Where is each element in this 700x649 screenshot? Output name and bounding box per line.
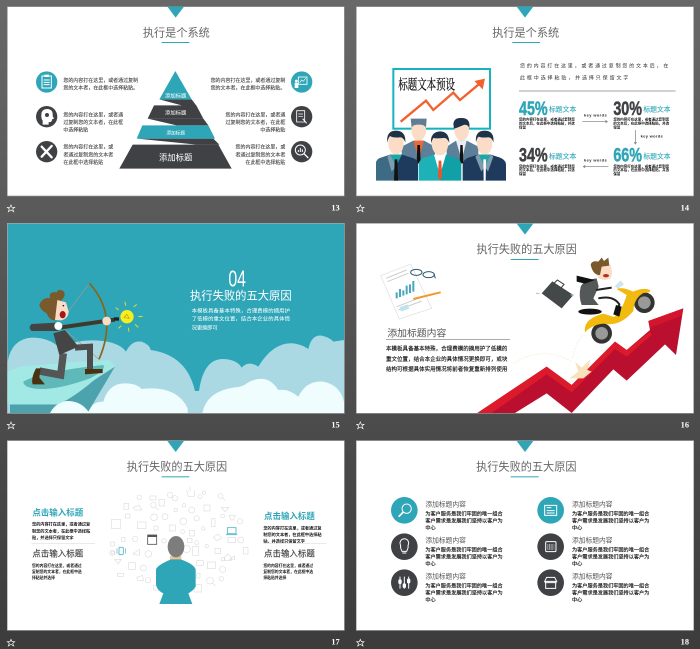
item: light bulb: 为客户服务是我们牢固的唯一组合 (425, 545, 503, 553)
paragraph: 重文位置，结合本企业的具体情况更换即可，或块 (386, 355, 508, 363)
archer with bow (30, 283, 115, 384)
item: sliders: 为客户服务是我们牢固的唯一组合 (425, 581, 503, 589)
footer star and page number (357, 203, 690, 212)
pyramid: 添加标题 (159, 153, 193, 163)
seat (578, 309, 602, 315)
wheels (591, 292, 655, 344)
slide 16: failure reasons with scooter (356, 223, 694, 429)
left text blocks: 您的内容打在这里，或者通 (63, 111, 123, 118)
stat: 45%: 的文本后，在此框中选择粘贴，并选 (519, 120, 575, 125)
front centre man (419, 131, 461, 181)
footer star and page number (7, 637, 340, 646)
footer star and page number: 15 (331, 420, 340, 429)
right text column: 您的内容打在这里，或者通过 (263, 563, 313, 568)
back right man (447, 118, 478, 163)
right text column: 贴，并选择只保留文字 (263, 538, 305, 544)
stat: 34%: 的文本后，在此框中选择粘贴，并选 (519, 167, 575, 172)
slide 14: people and percentages (356, 7, 694, 212)
title: 执行是个系统 (143, 25, 210, 39)
slide 17: thinking person with icon cloud (7, 441, 344, 646)
title: 执行失败的五大原因 (127, 459, 227, 473)
item: calendar: 为客户服务是我们牢固的唯一组合 (572, 545, 649, 553)
jacket (580, 278, 599, 305)
item: store: 为客户服务是我们牢固的唯一组合 (572, 581, 649, 589)
item: calendar (537, 533, 649, 567)
item: magnifier: 中心 (425, 523, 436, 531)
left text column: 点击输入标题 (32, 507, 84, 517)
stat: 34% (519, 146, 576, 176)
paragraph: 本模板具备基本特殊，合理费模的摘用护了低模的 (386, 345, 508, 353)
front left man (376, 131, 418, 181)
slide 13: system pyramid (7, 7, 344, 212)
item: sliders: 中心 (425, 595, 436, 603)
section description: 况更换即可 (192, 324, 218, 332)
subheading: 添加标题内容 (387, 326, 446, 339)
right text column: 点击输入标题 (264, 511, 315, 521)
left text column (32, 507, 91, 580)
cliff (8, 360, 115, 413)
stat: 34%: 标题文本 (549, 151, 576, 160)
front right man (463, 131, 506, 181)
stat: 30%: 30% (613, 99, 642, 120)
right text blocks: 在此框中选择粘贴 (245, 159, 285, 166)
intro text: 您的内容打在这里，或者通过复制您的文本后，在 (520, 63, 668, 70)
arrow: key words left: key words (584, 158, 607, 163)
item: calendar: 客户需求是发展我们坚持以客户为 (572, 553, 649, 561)
item: sliders: 客户需求是发展我们坚持以客户为 (425, 589, 503, 597)
intro text: 此框中选择粘贴，并选择只保留文字 (520, 74, 628, 81)
item: sliders: 添加标题内容 (425, 571, 466, 580)
item: sliders (391, 569, 503, 603)
item: calendar: 添加标题内容 (572, 535, 613, 544)
back left man (402, 119, 435, 163)
icon cloud (110, 487, 248, 592)
item: calendar: 中心 (572, 559, 582, 567)
stat: 45% (519, 99, 576, 129)
item: store: 客户需求是发展我们坚持以客户为 (572, 589, 649, 597)
item: newspaper: 为客户服务是我们牢固的唯一组合 (572, 509, 649, 517)
head (596, 265, 612, 280)
stat: 34%: 34% (519, 146, 548, 167)
right text blocks: 过复制您的文本者，在此框 (226, 119, 285, 126)
highlighted icons (117, 528, 237, 555)
item: light bulb: 添加标题内容 (425, 535, 466, 544)
section heading: 执行失败的五大原因 (190, 289, 292, 303)
item: newspaper: 中心 (572, 523, 582, 531)
item: newspaper (537, 497, 649, 531)
right text blocks: 您的内容打在这里，或者通过复制 (211, 77, 285, 84)
right text blocks: 者通过复制您的文本者 (235, 151, 285, 158)
hair (591, 258, 609, 275)
tie (577, 276, 595, 284)
title underline (162, 475, 189, 478)
stat: 30% (613, 99, 671, 129)
stat: 66% (613, 146, 671, 176)
arm and legs (596, 288, 619, 314)
stat: 45%: 保留 (519, 124, 526, 129)
top marker triangle (517, 7, 533, 18)
item: magnifier: 添加标题内容 (425, 500, 466, 509)
item: store (537, 569, 649, 603)
right text column: 点击输入标题 (264, 549, 315, 559)
item: newspaper: 客户需求是发展我们坚持以客户为 (572, 517, 649, 525)
footer star and page number (7, 203, 340, 212)
left text column: 您的内容打在这里，或者通过 (32, 563, 82, 568)
item: light bulb: 中心 (425, 559, 436, 567)
arrow: key words down: key words (641, 134, 663, 139)
slide 15: section cover with archer (7, 223, 344, 429)
footer star and page number (357, 637, 689, 646)
scooter body (585, 288, 650, 332)
footer star and page number (357, 420, 689, 429)
left text column: 制您的文本者，在此框中选择粘 (32, 527, 91, 533)
top marker triangle (517, 224, 533, 235)
left text blocks: 您的内容打在这里，或者通过复制 (63, 77, 138, 84)
intro text (520, 63, 668, 81)
right text column: 择粘贴并选择 (263, 575, 286, 580)
impact burst (569, 359, 592, 378)
left text blocks: 中选择粘贴 (63, 127, 88, 134)
icon: tools (36, 141, 57, 162)
stat: 66%: 66% (613, 146, 642, 167)
footer star and page number: 18 (681, 637, 689, 646)
top marker triangle (517, 441, 533, 452)
board with rising arrow (393, 69, 490, 129)
icon: document search (291, 106, 312, 127)
footer star and page number (7, 420, 340, 429)
mouth (603, 274, 609, 277)
arrow: key words right (582, 113, 607, 123)
pyramid: 添加标题 (166, 129, 185, 136)
right text column: 复制您的文本者，在此框中选 (263, 569, 313, 574)
title underline (511, 258, 539, 261)
paragraph: 结构可根据具体实用情况将前者恢复重新排列使用 (386, 365, 507, 373)
person from behind (156, 536, 196, 604)
dashed jump trail (513, 335, 583, 363)
stat: 66%: 保留 (613, 171, 621, 176)
stat: 45%: 您的内容打在这里，或者通过复制您 (519, 117, 575, 122)
left text blocks: 您的文本者，在此框中选择粘贴。 (63, 84, 138, 91)
arrow: key words right: key words (584, 113, 607, 118)
item: light bulb (391, 533, 503, 567)
footer star and page number: 14 (681, 203, 690, 212)
icon: presentation chart (291, 71, 312, 93)
mirror (614, 280, 624, 288)
footer star and page number: 13 (331, 203, 340, 212)
pyramid (119, 71, 232, 169)
right text blocks: 您的内容打在这里，或者通 (226, 111, 285, 118)
back clouds (8, 336, 344, 413)
stat: 66%: 您的内容打在这里，或者通过复制您 (613, 163, 670, 168)
right text column: 制您的文本者，在此框中选择粘 (263, 531, 322, 537)
section description: 了低模的重文位置，结合本企业的具体情 (192, 315, 291, 323)
stat: 30%: 保留 (613, 124, 621, 129)
left text blocks: 您的内容打在这里，或 (63, 144, 113, 151)
red rising arrow (477, 308, 683, 413)
pyramid: 添加标题 (165, 109, 187, 117)
slide 18: six item list (356, 441, 694, 646)
left text column: 点击输入标题 (32, 549, 84, 559)
item: magnifier (391, 497, 503, 531)
stat: 34%: 您的内容打在这里，或者通过复制您 (519, 163, 575, 168)
subheading rule (386, 338, 510, 340)
left text column: 择粘贴并选择 (32, 575, 55, 580)
flying briefcase (536, 280, 574, 308)
pyramid: 添加标题 (165, 91, 187, 99)
group of businessmen (376, 118, 506, 181)
right text column: 您的内容打在这里，或者通过复 (263, 524, 322, 530)
item: store: 中心 (572, 595, 582, 603)
arrow: key words down (634, 130, 663, 144)
left text blocks: 在此框中选择粘贴 (63, 159, 103, 166)
icon: glowing bulb (114, 302, 143, 332)
businessman on scooter (577, 258, 655, 344)
left text blocks (63, 77, 138, 166)
stat: 30%: 标题文本 (643, 105, 671, 114)
stat: 66%: 的文本后，在此框中选择粘贴，并选 (613, 167, 670, 172)
footer star and page number: 16 (681, 420, 689, 429)
item: light bulb: 客户需求是发展我们坚持以客户为 (425, 553, 503, 561)
icon: head (36, 106, 57, 127)
left text column: 贴，并选择只保留文字 (32, 534, 74, 540)
section description: 本模板具备基本特殊，合理费模的摘用护 (192, 306, 290, 314)
left text column: 您的内容打在这里，或者通过复 (32, 521, 91, 527)
stat: 45%: 标题文本 (549, 105, 576, 114)
title: 执行是个系统 (492, 25, 559, 39)
title underline (512, 41, 540, 44)
paragraph (386, 345, 508, 373)
left text blocks: 者通过复制您的文本者 (63, 151, 113, 158)
front clouds (50, 379, 344, 413)
item: magnifier: 为客户服务是我们牢固的唯一组合 (425, 509, 503, 517)
right text column (263, 511, 322, 580)
icon: clipboard (36, 71, 57, 93)
stat: 30%: 的文本后，在此框中选择粘贴，并选 (613, 120, 670, 125)
item: store: 添加标题内容 (572, 571, 613, 580)
icon: magnifier chart (291, 141, 312, 162)
title: 执行失败的五大原因 (476, 242, 577, 256)
right text blocks (211, 77, 285, 166)
right text blocks: 中选择粘贴 (260, 127, 285, 134)
left text blocks: 过复制您的文本者，在此框 (63, 119, 123, 126)
board with rising arrow: 标题文本预设 (398, 76, 455, 93)
top marker triangle (167, 7, 184, 18)
title underline (511, 475, 539, 478)
stat: 34%: 保留 (519, 171, 526, 176)
top marker triangle (167, 441, 184, 452)
arrow: key words left (583, 158, 608, 168)
item: newspaper: 添加标题内容 (572, 500, 613, 509)
footer star and page number: 17 (331, 637, 340, 646)
document with glasses and pencil (381, 264, 441, 319)
shoe (613, 305, 622, 317)
left text column: 复制您的文本者，在此框中选 (32, 569, 82, 574)
right text blocks: 您的文本者，在此框中选择粘贴。 (211, 84, 285, 91)
stat: 66%: 标题文本 (643, 151, 671, 160)
right text blocks: 您的内容打在这里，或 (235, 144, 285, 151)
stat: 30%: 您的内容打在这里，或者通过复制您 (613, 117, 670, 122)
section number: 04 (228, 265, 246, 291)
item: magnifier: 客户需求是发展我们坚持以客户为 (425, 517, 503, 525)
stat: 45%: 45% (519, 99, 548, 120)
title: 执行失败的五大原因 (476, 459, 577, 473)
section description (192, 306, 291, 332)
title underline (162, 41, 189, 44)
